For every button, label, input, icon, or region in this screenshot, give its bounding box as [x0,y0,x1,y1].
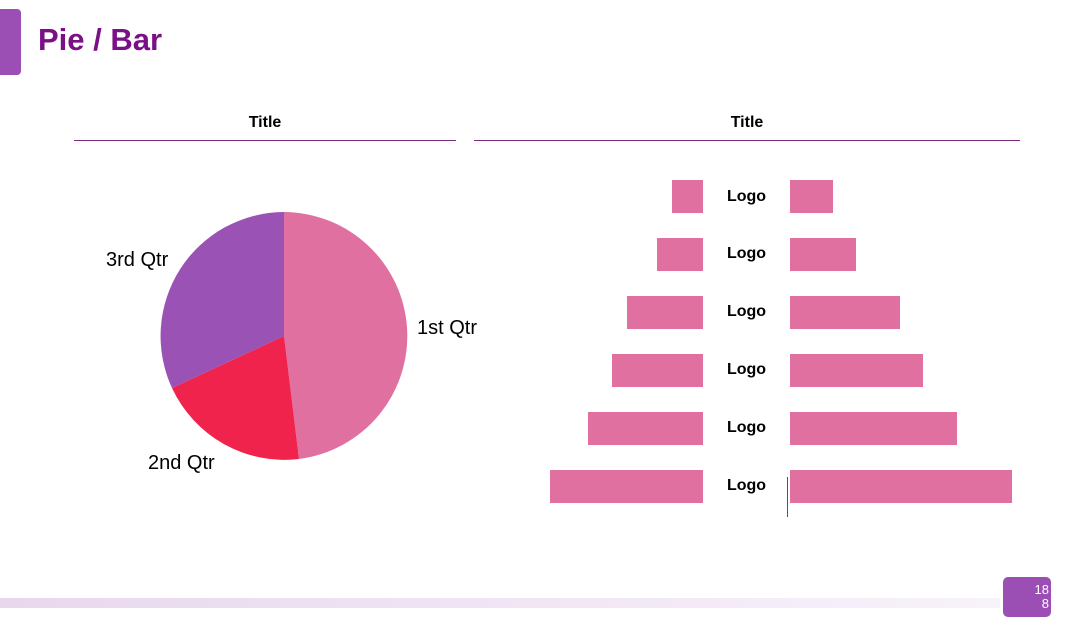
logo labels: Logo [727,477,766,494]
logo labels: Logo [727,245,766,262]
bar panel heading [474,114,1020,141]
page number: 18 [1035,582,1049,597]
logo labels: Logo [727,361,766,378]
pie chart: 1st Qtr [417,317,477,339]
page number: 8 [1042,596,1049,611]
pie chart [106,212,477,474]
logo labels: Logo [727,188,766,205]
pie panel heading: Title [249,114,281,131]
pie chart: 2nd Qtr [148,452,215,474]
pie panel heading [74,114,456,141]
page number [1003,577,1051,617]
pie chart: 3rd Qtr [106,249,169,271]
butterfly bar chart [550,180,1012,517]
logo labels: Logo [727,419,766,436]
title: Pie / Bar [38,22,162,57]
footer gradient bar [0,598,1000,608]
title accent tab [0,9,21,75]
logo labels: Logo [727,303,766,320]
bar panel heading: Title [731,114,763,131]
